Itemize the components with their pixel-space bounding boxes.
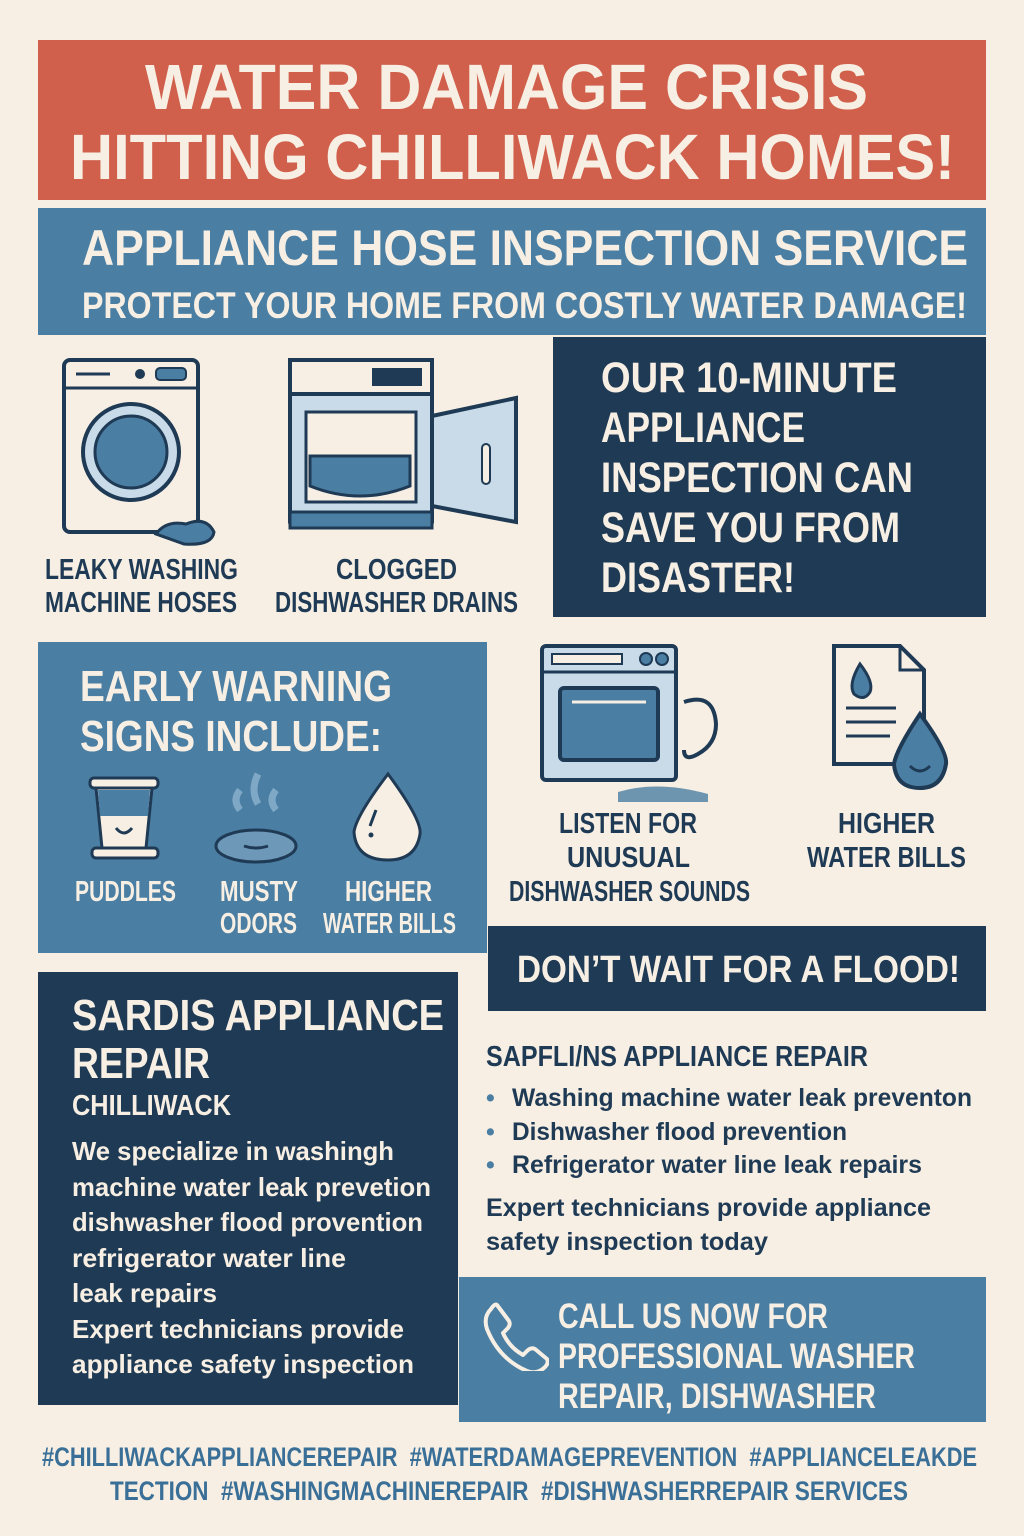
panel: call to action: [459, 1277, 986, 1422]
icon: water drop: [352, 772, 422, 862]
services paragraph: [72, 1136, 431, 1379]
label: listen for sounds: DISHWASHER SOUNDS: [509, 876, 750, 908]
label: washing machine hoses: MACHINE HOSES: [45, 587, 237, 619]
call text: [558, 1297, 915, 1416]
call text: PROFESSIONAL WASHER: [558, 1337, 915, 1376]
bullet list: •: [486, 1084, 495, 1112]
hashtags: #CHILLIWACKAPPLIANCEREPAIR #WATERDAMAGEPREVENTION #APPLIANCELEAKDE: [42, 1442, 977, 1472]
label: dishwasher drains: CLOGGED: [336, 554, 457, 586]
company name: REPAIR: [72, 1039, 210, 1088]
bullet list: •: [486, 1118, 495, 1146]
title text: WATER DAMAGE CRISIS: [145, 51, 868, 123]
location: CHILLIWACK: [72, 1090, 231, 1122]
label: washing machine hoses: LEAKY WASHING: [45, 554, 238, 586]
company name: [72, 991, 444, 1088]
bullet list: [486, 1084, 972, 1179]
panel: don't wait banner: [488, 926, 986, 1011]
company name: SARDIS APPLIANCE: [72, 991, 444, 1040]
inspection text: APPLIANCE: [601, 404, 805, 452]
warning heading: EARLY WARNING: [80, 662, 392, 711]
services paragraph: appliance safety inspection: [72, 1349, 414, 1379]
expert text: safety inspection today: [486, 1228, 768, 1256]
label: higher water bills: WATER BILLS: [323, 908, 456, 940]
label: puddles: PUDDLES: [75, 876, 176, 908]
label: listen for sounds: [509, 808, 750, 908]
warning heading: [80, 662, 392, 761]
panel: sardis appliance repair: [38, 972, 458, 1405]
inspection text: [601, 354, 913, 602]
icon: oven with ear: [540, 644, 718, 802]
label: higher water bills right: [807, 808, 966, 874]
label: higher water bills right: WATER BILLS: [807, 842, 966, 874]
bullet list: Washing machine water leak preventon: [512, 1084, 972, 1112]
panel: 10-minute inspection: [553, 337, 986, 617]
services paragraph: Expert technicians provide: [72, 1314, 404, 1344]
icon: puddles cup: [88, 776, 160, 860]
hashtags: [42, 1442, 977, 1506]
label: listen for sounds: LISTEN FOR: [559, 808, 697, 840]
inspection text: DISASTER!: [601, 554, 795, 602]
icon: dishwasher: [288, 358, 518, 530]
inspection text: INSPECTION CAN: [601, 454, 913, 502]
service subheading: PROTECT YOUR HOME FROM COSTLY WATER DAMAGE!: [82, 285, 967, 326]
services paragraph: leak repairs: [72, 1278, 217, 1308]
title text: [70, 51, 955, 193]
icon: musty odor: [214, 772, 298, 864]
hashtags: TECTION #WASHINGMACHINEREPAIR #DISHWASHERREPAIR SERVICES: [110, 1476, 908, 1506]
warning heading: SIGNS INCLUDE:: [80, 712, 382, 761]
call text: CALL US NOW FOR: [558, 1297, 828, 1336]
label: dishwasher drains: [275, 554, 518, 619]
expert text: [486, 1194, 931, 1256]
label: washing machine hoses: [45, 554, 238, 619]
label: dishwasher drains: DISHWASHER DRAINS: [275, 587, 518, 619]
services heading: SAPFLI/NS APPLIANCE REPAIR: [486, 1041, 868, 1073]
icon: washing machine: [62, 358, 216, 546]
services paragraph: dishwasher flood provention: [72, 1207, 423, 1237]
services paragraph: machine water leak prevetion: [72, 1172, 431, 1202]
title banner: [38, 40, 986, 200]
services paragraph: We specialize in washingh: [72, 1136, 394, 1166]
panel: early warning signs: [38, 642, 487, 953]
inspection text: SAVE YOU FROM: [601, 504, 900, 552]
services paragraph: refrigerator water line: [72, 1242, 346, 1272]
bullet list: •: [486, 1151, 495, 1179]
label: listen for sounds: UNUSUAL: [567, 842, 690, 874]
bullet list: Refrigerator water line leak repairs: [512, 1151, 922, 1179]
inspection text: OUR 10-MINUTE: [601, 354, 897, 402]
bullet list: Dishwasher flood prevention: [512, 1118, 847, 1146]
expert text: Expert technicians provide appliance: [486, 1194, 931, 1222]
icon: phone: [484, 1302, 549, 1371]
label: musty odors: [220, 876, 298, 940]
title text: HITTING CHILLIWACK HOMES!: [70, 121, 955, 193]
text block: services list: [486, 1041, 972, 1256]
call text: REPAIR, DISHWASHER: [558, 1377, 876, 1416]
label: musty odors: MUSTY: [220, 876, 298, 908]
subtitle band: [38, 208, 986, 335]
label: higher water bills: [323, 876, 456, 940]
label: musty odors: ODORS: [220, 908, 297, 940]
label: higher water bills right: HIGHER: [838, 808, 935, 840]
icon: water bill document: [832, 644, 948, 790]
don't wait text: DON’T WAIT FOR A FLOOD!: [517, 949, 960, 991]
service heading: APPLIANCE HOSE INSPECTION SERVICE: [82, 220, 968, 276]
label: higher water bills: HIGHER: [345, 876, 432, 908]
